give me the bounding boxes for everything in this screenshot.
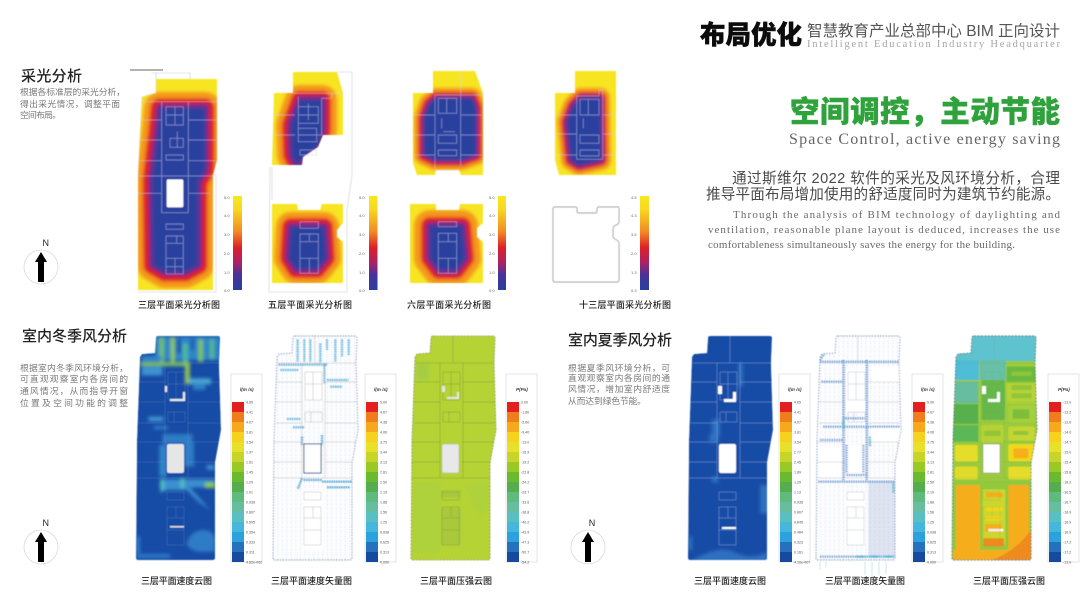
icon: north arrow winter	[24, 518, 58, 564]
legend: summer velocity: l(m /s)	[788, 387, 802, 392]
legend: summer vector: 1.88	[927, 500, 934, 504]
legend: summer velocity: 4.41	[794, 410, 801, 414]
icon: north arrow summer	[571, 518, 605, 564]
heading: daylight analysis: 采光分析	[21, 68, 82, 85]
legend: summer velocity: 1.89	[794, 470, 801, 474]
legend: summer velocity: 1.13	[794, 490, 801, 494]
legend: winter vector: 0.313	[380, 550, 389, 554]
summer description: 风情况，增加室内舒适度	[568, 383, 670, 394]
project title english: Intelligent Education Industry Headquarter	[807, 39, 1060, 50]
legend: summer pressure: -14.0	[1063, 430, 1071, 434]
legend: floor 13 daylight: 4.3	[631, 213, 637, 218]
legend: winter velocity: 1.97	[246, 450, 253, 454]
summer description	[568, 362, 670, 406]
winter description: 通风情况，从而指导开窗	[20, 385, 128, 396]
legend: winter velocity: 0.333	[246, 540, 255, 544]
legend: floor 5 daylight: 5.0	[359, 195, 365, 200]
legend: winter pressure: P(Pa)	[516, 387, 528, 392]
icon: north arrow winter: N	[42, 518, 49, 528]
legend: floor 3 daylight: 5.0	[224, 195, 230, 200]
chinese description: 推导平面布局增加使用的舒适度同时为建筑节约能源。	[706, 186, 1060, 203]
legend: winter vector: 2.19	[380, 490, 387, 494]
legend: summer velocity: 3.81	[794, 430, 801, 434]
legend: summer vector: l(m /s)	[921, 387, 935, 392]
legend: winter vector: 2.50	[380, 480, 387, 484]
atrium and voids	[166, 386, 184, 528]
english description: Through the analysis of BIM technology of daylighting and	[733, 209, 1060, 221]
legend: winter vector: 4.06	[380, 430, 387, 434]
legend: summer vector: 0.938	[927, 530, 936, 534]
caption: winter vector: 三层平面速度矢量图	[271, 575, 352, 586]
caption: winter pressure: 三层平面压强云图	[420, 576, 492, 586]
heading: summer wind: 室内夏季风分析	[568, 331, 672, 349]
legend: floor 6 daylight: 0.0	[489, 288, 495, 293]
summer description: 从而达到绿色节能。	[568, 395, 646, 406]
daylight description: 空间布局。	[20, 109, 61, 120]
legend: summer velocity: 0.161	[794, 550, 803, 554]
legend: winter vector: 4.67	[380, 410, 387, 414]
legend: summer pressure: -15.0	[1063, 450, 1071, 454]
legend: winter pressure	[506, 374, 537, 564]
legend: winter velocity: 3.54	[246, 440, 253, 444]
legend: summer velocity: 4.65	[794, 400, 801, 404]
chinese description: 通过斯维尔 2022 软件的采光及风环境分析，合理	[732, 169, 1060, 187]
legend: winter velocity: 0.311	[246, 550, 255, 554]
winter description	[20, 362, 128, 408]
chart: winter velocity vector	[272, 334, 359, 562]
legend: summer vector: 4.67	[927, 410, 934, 414]
legend: summer pressure: -15.8	[1063, 470, 1071, 474]
legend: summer vector: 0.313	[927, 550, 936, 554]
caption: winter velocity: 三层平面速度云图	[141, 575, 212, 586]
legend: floor 5 daylight: 3.0	[359, 232, 365, 237]
legend: winter pressure: -50.7	[521, 550, 529, 554]
caption: floor 6 daylight: 六层平面采光分析图	[407, 299, 491, 310]
legend: floor 13 daylight: 4.5	[631, 195, 637, 200]
caption: summer vector: 三层平面速度矢量图	[825, 575, 905, 586]
summer description: 直观观察室内各房间的通	[568, 372, 670, 383]
legend: summer pressure: -17.2	[1063, 550, 1071, 554]
legend: floor 3 daylight: 4.0	[224, 213, 230, 218]
legend: winter vector: l(m /s)	[374, 387, 388, 392]
legend: winter pressure: -15.9	[521, 450, 529, 454]
legend: winter pressure: -40.2	[521, 520, 529, 524]
legend: summer vector: 5.00	[927, 400, 934, 404]
legend: winter pressure: -1.80	[521, 410, 529, 414]
legend: winter pressure: -43.9	[521, 530, 529, 534]
empty floor outline	[553, 207, 619, 282]
legend: summer pressure: P(Pa)	[1058, 387, 1070, 392]
daylight description	[20, 86, 125, 120]
legend: winter pressure: -19.2	[521, 460, 529, 464]
caption: floor 3 daylight: 三层平面采光分析图	[138, 299, 220, 310]
legend: summer vector: 4.38	[927, 420, 934, 424]
legend: winter vector: 4.38	[380, 420, 387, 424]
legend: floor 13 daylight	[631, 195, 649, 293]
chart: summer velocity vector	[815, 334, 902, 577]
legend: summer pressure: -16.5	[1063, 490, 1071, 494]
legend: summer velocity: 0.484	[794, 530, 803, 534]
legend: floor 6 daylight	[489, 195, 506, 293]
legend: winter velocity: 0.354	[246, 530, 255, 534]
legend: summer velocity: 0.323	[794, 540, 803, 544]
legend: winter velocity: 1.45	[246, 470, 253, 474]
legend: winter vector: 1.25	[380, 520, 387, 524]
legend: summer pressure: -16.9	[1063, 510, 1071, 514]
legend: winter velocity: 1.61	[246, 460, 253, 464]
legend: floor 6 daylight: 3.0	[489, 232, 495, 237]
legend: winter pressure: -36.8	[521, 510, 529, 514]
legend: floor 5 daylight	[359, 195, 378, 293]
legend: winter velocity: 0.936	[246, 500, 255, 504]
legend: winter velocity: l(m /s)	[240, 387, 254, 392]
legend: summer vector: 1.25	[927, 520, 934, 524]
legend: winter pressure: 2.00	[521, 400, 528, 404]
legend: winter velocity: 1.01	[246, 490, 253, 494]
project title: 智慧教育产业总部中心 BIM 正向设计	[807, 22, 1060, 40]
legend: winter velocity: 3.81	[246, 430, 253, 434]
legend: winter pressure: -33.6	[521, 500, 529, 504]
slogan english: Space Control, active energy saving	[789, 131, 1060, 148]
icon: north arrow daylight	[24, 238, 58, 284]
legend: floor 6 daylight: 2.0	[489, 251, 495, 256]
legend: winter velocity: 4.65	[246, 400, 253, 404]
summer description: 根据夏季风环境分析，可	[568, 362, 670, 373]
icon: north arrow daylight: N	[42, 238, 49, 248]
legend: summer vector: 2.50	[927, 480, 934, 484]
legend: floor 6 daylight: 5.0	[489, 195, 495, 200]
legend: winter vector: 1.56	[380, 510, 387, 514]
legend: winter velocity: 0.505	[246, 520, 255, 524]
legend: floor 5 daylight: 2.0	[359, 251, 365, 256]
legend: winter vector: 5.00	[380, 400, 387, 404]
legend: summer pressure: -16.7	[1063, 500, 1071, 504]
legend: winter pressure: -54.2	[521, 560, 529, 564]
legend: summer vector: 3.44	[927, 450, 934, 454]
legend: summer vector: 3.75	[927, 440, 934, 444]
legend: winter pressure: -29.7	[521, 490, 529, 494]
section title: layout optimisation: 布局优化	[700, 20, 802, 50]
legend: floor 5 daylight: 4.0	[359, 213, 365, 218]
winter description: 位置及空间功能的调整	[20, 397, 128, 408]
caption: summer velocity: 三层平面速度云图	[694, 575, 766, 586]
legend: floor 6 daylight: 1.0	[489, 270, 495, 275]
legend: winter vector: 2.81	[380, 470, 387, 474]
legend: summer pressure: -14.7	[1063, 440, 1071, 444]
legend: summer pressure: -13.0	[1063, 560, 1071, 564]
legend: floor 13 daylight: 0.3	[631, 288, 637, 293]
legend: winter vector: 0.625	[380, 540, 389, 544]
legend: summer velocity: 1.29	[794, 480, 801, 484]
legend: winter pressure: -47.3	[521, 540, 529, 544]
legend: summer velocity: 0.645	[794, 520, 803, 524]
chart: winter velocity contour	[136, 336, 221, 560]
legend: winter velocity: 1.29	[246, 480, 253, 484]
legend: summer pressure: -13.6	[1063, 420, 1071, 424]
green slogan: 空间调控，主动节能	[790, 95, 1060, 129]
title block	[700, 20, 1060, 50]
legend: summer pressure: -16.9	[1063, 530, 1071, 534]
legend: summer vector: 3.13	[927, 460, 934, 464]
plan: floor 5 daylight	[265, 65, 352, 292]
legend: summer pressure: -13.0	[1063, 400, 1071, 404]
plan: floor 6 daylight	[409, 70, 484, 284]
legend: winter vector: 0.000	[380, 560, 389, 564]
legend: summer vector: 2.81	[927, 470, 934, 474]
english description: comfortableness simultaneously saves the energy for the building.	[708, 239, 1015, 251]
chart: winter pressure contour	[411, 336, 496, 560]
legend: winter vector: 3.44	[380, 450, 387, 454]
legend: summer velocity: 0.936	[794, 500, 803, 504]
legend: summer velocity: 4.07	[794, 420, 801, 424]
legend: floor 3 daylight	[224, 195, 242, 293]
legend: summer vector: 2.19	[927, 490, 934, 494]
legend: winter pressure: -5.60	[521, 420, 529, 424]
winter description: 可直观观察室内各房间的	[20, 373, 128, 384]
legend: floor 13 daylight: 3.5	[631, 232, 637, 237]
plan: floor 3 daylight	[137, 72, 218, 293]
legend: summer vector: 1.56	[927, 510, 934, 514]
legend: floor 13 daylight: 1.3	[631, 270, 637, 275]
legend: winter vector: 3.13	[380, 460, 387, 464]
chart: summer pressure contour	[950, 335, 1043, 567]
caption: floor 13 daylight: 十三层平面采光分析图	[579, 299, 671, 310]
legend: winter vector: 0.938	[380, 530, 389, 534]
legend: summer velocity	[779, 374, 810, 564]
legend: winter pressure: -13.0	[521, 440, 529, 444]
plan: floor 13 daylight	[550, 65, 620, 282]
legend: summer vector	[912, 374, 943, 564]
legend: floor 3 daylight: 0.0	[224, 288, 230, 293]
legend: winter pressure: -22.8	[521, 470, 529, 474]
legend: floor 13 daylight: 2.0	[631, 251, 637, 256]
legend: summer vector: 0.000	[927, 560, 936, 564]
legend: summer velocity: 2.77	[794, 450, 801, 454]
legend: floor 5 daylight: 1.0	[359, 270, 365, 275]
legend: summer pressure: -16.9	[1063, 520, 1071, 524]
legend: winter pressure: -9.40	[521, 430, 529, 434]
daylight description: 根据各标准层的采光分析，	[20, 86, 125, 97]
legend: winter velocity	[231, 374, 262, 564]
legend: winter velocity: 0.807	[246, 510, 255, 514]
winter description: 根据室内冬季风环境分析，	[20, 362, 128, 373]
legend: summer pressure: -15.4	[1063, 460, 1071, 464]
english description	[708, 209, 1060, 251]
legend: summer vector: 4.06	[927, 430, 934, 434]
legend: winter velocity: 4.07	[246, 420, 253, 424]
legend: summer vector: 0.625	[927, 540, 936, 544]
legend: floor 3 daylight: 3.0	[224, 232, 230, 237]
heading: winter wind: 室内冬季风分析	[22, 327, 127, 345]
icon: north arrow summer: N	[589, 518, 595, 528]
legend: winter pressure: -24.2	[521, 480, 529, 484]
legend: floor 5 daylight: 0.0	[359, 288, 365, 293]
legend: winter vector: 1.88	[380, 500, 387, 504]
legend: summer velocity: 3.54	[794, 440, 801, 444]
legend: floor 3 daylight: 2.0	[224, 251, 230, 256]
legend: summer pressure: -17.2	[1063, 540, 1071, 544]
chinese description	[706, 169, 1060, 203]
legend: summer velocity: 2.45	[794, 460, 801, 464]
daylight description: 得出采光情况，调整平面	[20, 98, 120, 109]
legend: winter velocity: 4.41	[246, 410, 253, 414]
chart: summer velocity contour	[688, 336, 773, 563]
legend: winter vector: 3.75	[380, 440, 387, 444]
english description: ventilation, reasonable plane layout is deduced, increases the use	[708, 224, 1060, 236]
caption: floor 5 daylight: 五层平面采光分析图	[268, 299, 352, 310]
legend: floor 6 daylight: 4.0	[489, 213, 495, 218]
legend: floor 3 daylight: 1.0	[224, 270, 230, 275]
legend: summer pressure	[1048, 374, 1079, 564]
legend: summer velocity: 0.807	[794, 510, 803, 514]
legend: summer pressure: -13.2	[1063, 410, 1071, 414]
legend: winter vector	[365, 374, 396, 564]
legend: winter velocity: 4.62e-002	[246, 560, 262, 564]
legend: summer velocity: 4.10e-007	[794, 560, 810, 564]
legend: summer pressure: -16.2	[1063, 480, 1071, 484]
caption: summer pressure: 三层平面压强云图	[973, 576, 1045, 586]
